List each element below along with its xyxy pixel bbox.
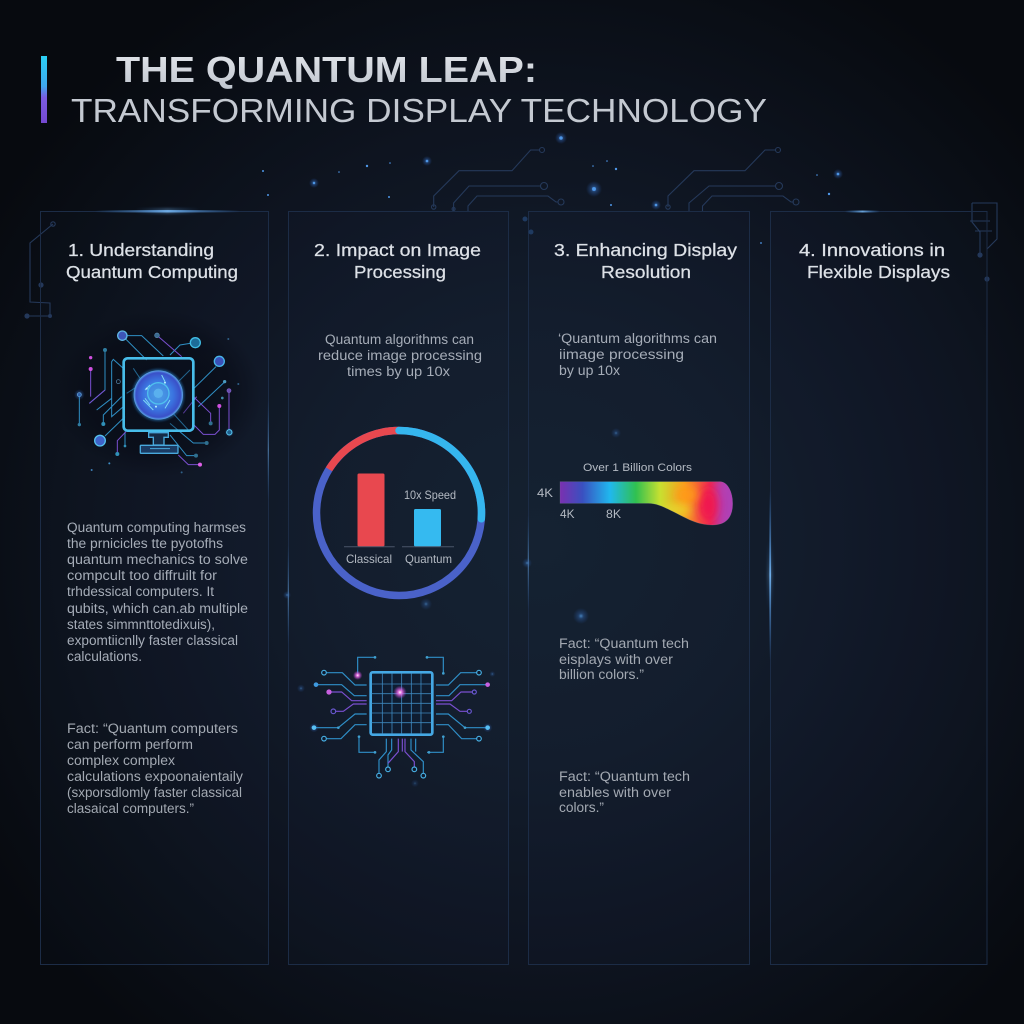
heading: panel 3: Resolution — [601, 262, 691, 282]
fact text: panel 3 first — [559, 636, 689, 682]
body text: panel 1: trhdessical computers. It — [67, 584, 214, 599]
fact text: panel 3 second: enables with over — [559, 785, 672, 800]
fact text: panel 1: (sxporsdlomly faster classical — [67, 785, 242, 800]
resolution labels: 8K — [606, 507, 621, 521]
body text: panel 1: Quantum computing harmses — [67, 520, 246, 535]
fact text: panel 3 first: Fact: “Quantum tech — [559, 636, 689, 651]
heading: panel 1: Quantum Computing — [66, 262, 238, 282]
title line 2: TRANSFORMING DISPLAY TECHNOLOGY — [71, 93, 767, 130]
body text: panel 1: calculations. — [67, 649, 142, 664]
body text: panel 3: ‘Quantum algorithms can — [558, 331, 717, 346]
icon: processor chip with circuit traces — [297, 656, 495, 787]
icon: quantum computer monitor with circuits — [55, 310, 262, 477]
chart labels: Classical — [346, 552, 392, 566]
body text: panel 2: Quantum algorithms can — [325, 332, 474, 347]
trace nodes — [297, 656, 495, 787]
body text: panel 1: expomtiicnlly faster classical — [67, 633, 238, 648]
heading: panel 3 — [554, 240, 737, 282]
fact text: panel 3 first: billion colors.” — [559, 667, 644, 682]
heading: panel 2: 2. Impact on Image — [314, 240, 481, 260]
chart labels: 10x Speed — [404, 488, 456, 502]
fact text: panel 1: complex complex — [67, 753, 175, 768]
circuit nodes — [74, 331, 239, 473]
heading: panel 3: 3. Enhancing Display — [554, 240, 737, 260]
chip grid — [371, 672, 432, 735]
fact text: panel 1: clasaical computers.” — [67, 801, 194, 816]
heading: panel 2: Processing — [354, 262, 446, 282]
fact text: panel 1 — [67, 721, 243, 816]
fact text: panel 1: Fact: “Quantum computers — [67, 721, 238, 736]
chart labels: Quantum — [405, 552, 452, 566]
body text: panel 3 — [558, 331, 717, 378]
title line 1: THE QUANTUM LEAP: — [116, 49, 537, 90]
monitor stand — [149, 433, 168, 445]
fact text: panel 3 second: Fact: “Quantum tech — [559, 769, 690, 784]
body text: panel 1: qubits, which can.ab multiple — [67, 601, 248, 616]
chart: colour spectrum resolution bar — [537, 463, 733, 526]
body text: panel 1: compcult too diffruilt for — [67, 568, 218, 583]
panel: impact on image processing — [288, 212, 508, 964]
quantum sphere — [132, 369, 184, 421]
resolution labels: 4K — [537, 486, 553, 500]
heading: panel 4: Flexible Displays — [807, 262, 950, 282]
bar: classical — [358, 474, 384, 546]
body text: panel 1: the prnicicles tte pyotofhs — [67, 536, 223, 551]
body text: panel 1: states simmnttotedixuis), — [67, 617, 215, 632]
body text: panel 3: by up 10x — [559, 363, 620, 378]
panel: understanding quantum computing — [40, 212, 268, 964]
bar: quantum — [414, 509, 441, 546]
heading: panel 2 — [314, 240, 481, 282]
heading: panel 1: 1. Understanding — [68, 240, 214, 260]
fact text: panel 3 first: eisplays with over — [559, 652, 674, 667]
body text: panel 3: iimage processing — [559, 347, 684, 362]
panel: enhancing display resolution — [528, 212, 750, 964]
monitor screen — [124, 358, 193, 431]
body text: panel 2: times by up 10x — [347, 364, 450, 379]
title accent bar — [41, 56, 47, 123]
ring — [316, 430, 482, 596]
background circuit traces and star field — [24, 132, 997, 319]
title block — [41, 49, 767, 130]
heading: panel 4 — [799, 240, 950, 282]
chart: classical vs quantum speed ring — [316, 430, 482, 596]
heading: panel 1 — [66, 240, 238, 282]
body text: panel 1: quantum mechanics to solve — [67, 552, 248, 567]
chart labels — [346, 488, 456, 566]
body text: panel 2 — [318, 332, 482, 379]
spectrum gradient shape — [560, 482, 733, 526]
body text: panel 2: reduce image processing — [318, 348, 482, 363]
resolution labels: 4K — [560, 507, 574, 521]
fact text: panel 3 second — [559, 769, 690, 815]
panel: innovations in flexible displays — [770, 212, 987, 964]
fact text: panel 1: can perform perform — [67, 737, 193, 752]
resolution labels — [537, 486, 621, 521]
fact text: panel 1: calculations expoonaientaily — [67, 769, 243, 784]
heading: panel 4: 4. Innovations in — [799, 240, 945, 260]
spectrum label: Over 1 Billion Colors — [583, 462, 693, 474]
body text: panel 1 — [67, 520, 248, 664]
fact text: panel 3 second: colors.” — [559, 800, 604, 815]
